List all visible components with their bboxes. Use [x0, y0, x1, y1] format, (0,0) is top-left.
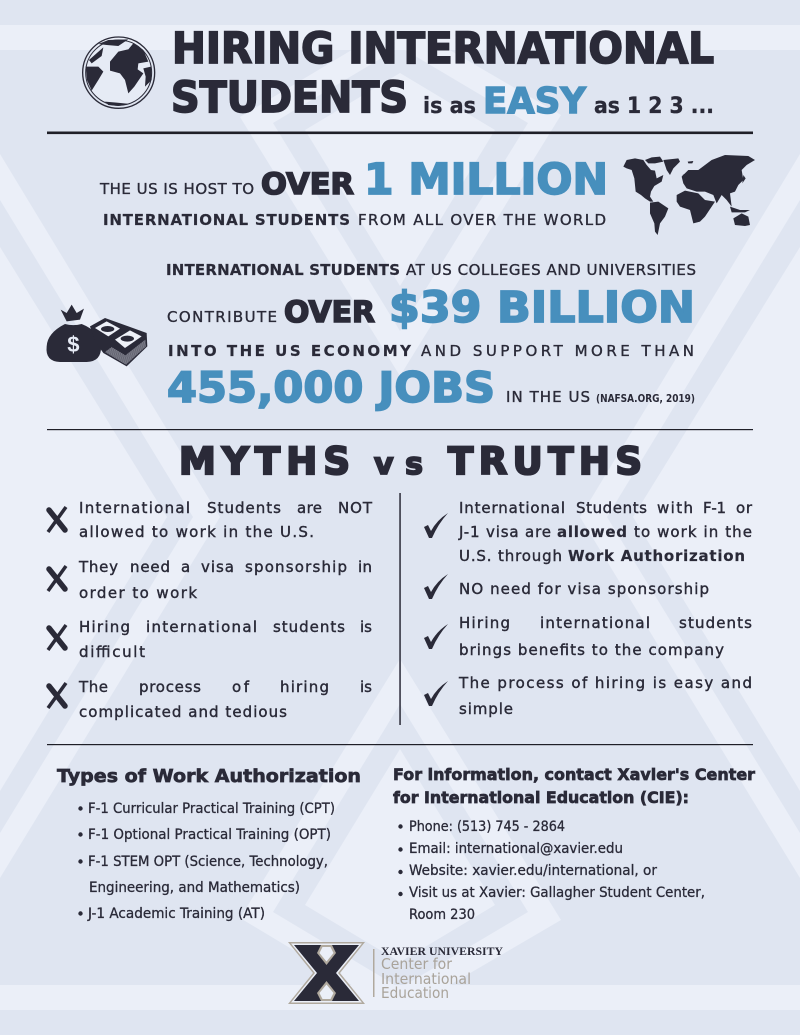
- stat: economic contribution: [166, 261, 696, 412]
- panel: types of work authorization: [57, 766, 361, 922]
- stat: economic contribution: (NAFSA.ORG, 2019): [596, 393, 695, 405]
- myth 1: are: [297, 499, 322, 517]
- list: [78, 801, 335, 922]
- title: HIRING INTERNATIONAL: [172, 24, 714, 74]
- list: Room 230: [409, 907, 475, 923]
- stat: 1 million students: FROM ALL OVER THE WORLD: [358, 211, 606, 229]
- truth 1: [424, 499, 753, 565]
- myth 2: order to work: [79, 584, 197, 602]
- icon: globe: [83, 37, 155, 108]
- myth 4: hiring: [280, 678, 329, 696]
- myth 4: is: [360, 678, 372, 696]
- myth 2: visa: [201, 558, 234, 576]
- myth 1: Students: [207, 499, 281, 517]
- truth 1: J-1 visa are: [458, 523, 551, 541]
- myth 4: process: [139, 678, 201, 696]
- list: Engineering, and Mathematics): [89, 880, 300, 896]
- heading: myths vs truths: [179, 440, 642, 483]
- myth 2: They: [78, 558, 118, 576]
- myth 3: international: [146, 618, 257, 636]
- truth 1: F-1: [703, 499, 726, 517]
- title: is as: [423, 94, 476, 119]
- title: [171, 24, 714, 123]
- title: as 1 2 3 ...: [594, 94, 714, 119]
- title: STUDENTS: [171, 73, 408, 123]
- stat: economic contribution: AT US COLLEGES AND UNIVERSITIES: [406, 261, 696, 279]
- myth 2: need: [130, 558, 170, 576]
- title: EASY: [483, 81, 587, 122]
- list: J-1 Academic Training (AT): [87, 906, 265, 922]
- truth 1: U.S. through: [459, 547, 562, 565]
- truth 2: [424, 574, 709, 599]
- panel: contact information: [393, 765, 755, 923]
- list: [398, 819, 705, 923]
- myth 1: [48, 499, 373, 541]
- myth 1: International: [79, 499, 190, 517]
- stat: economic contribution: INTO THE US ECONOMY: [168, 342, 412, 360]
- heading: myths vs truths: MYTHS: [179, 440, 350, 483]
- stat: economic contribution: AND SUPPORT MORE THAN: [421, 342, 694, 360]
- list: F-1 STEM OPT (Science, Technology,: [88, 854, 328, 870]
- myth 4: The: [78, 678, 108, 696]
- truth 1: with: [657, 499, 693, 517]
- stat: 1 million students: INTERNATIONAL STUDENTS: [103, 211, 350, 229]
- list: Phone: (513) 745 - 2864: [409, 819, 565, 835]
- myth 3: Hiring: [79, 618, 130, 636]
- list: F-1 Optional Practical Training (OPT): [88, 827, 331, 843]
- logo text: International: [381, 970, 471, 988]
- logo: Xavier University Center for International Education: [288, 942, 504, 1004]
- myth 3: is: [360, 618, 372, 636]
- myth 2: a: [181, 558, 190, 576]
- myth 3: [48, 618, 372, 661]
- stat: 1 million students: [99, 155, 608, 229]
- list: F-1 Curricular Practical Training (CPT): [88, 801, 335, 817]
- stat: 1 million students: 1 MILLION: [364, 155, 608, 205]
- truth 4: [424, 674, 752, 718]
- truth 2: NO need for visa sponsorship: [459, 580, 709, 598]
- logo text: XAVIER UNIVERSITY: [381, 946, 504, 958]
- icon: world map: [623, 155, 755, 235]
- truth 3: brings benefits to the company: [459, 641, 724, 659]
- myth 2: [48, 558, 372, 602]
- myth 2: in: [358, 558, 372, 576]
- heading: myths vs truths: vs: [374, 447, 423, 482]
- truth 1: or: [736, 499, 753, 517]
- stat: economic contribution: IN THE US: [506, 388, 590, 406]
- stat: economic contribution: INTERNATIONAL STUDENTS: [166, 261, 400, 279]
- stat: economic contribution: CONTRIBUTE: [167, 308, 277, 326]
- truth 4: The process of hiring is easy and: [458, 674, 752, 692]
- stat: economic contribution: OVER: [284, 295, 375, 329]
- heading: for International Education (CIE):: [393, 788, 689, 807]
- heading: For information, contact Xavier's Center: [393, 765, 755, 784]
- truth 1: International: [459, 499, 565, 517]
- logo text: Education: [381, 984, 449, 1002]
- myth 3: students: [273, 618, 345, 636]
- truth 1: allowed: [557, 523, 627, 541]
- panel: truths: [424, 499, 753, 718]
- icon: X mark: [288, 942, 365, 1004]
- truth 3: Hiring: [459, 614, 510, 632]
- panel: myths: [48, 499, 373, 721]
- stat: economic contribution: $39 BILLION: [389, 283, 695, 333]
- stat: 1 million students: OVER: [261, 167, 354, 201]
- myth 2: sponsorship: [245, 558, 347, 576]
- heading: myths vs truths: TRUTHS: [448, 440, 642, 483]
- list: Email: international@xavier.edu: [409, 841, 623, 857]
- myth 1: allowed to work in the U.S.: [79, 523, 314, 541]
- truth 3: [424, 614, 752, 659]
- icon: money bag and cash: $: [67, 332, 79, 357]
- list: Website: xavier.edu/international, or: [409, 863, 657, 879]
- heading: Types of Work Authorization: [57, 766, 361, 787]
- stat: economic contribution: 455,000 JOBS: [167, 363, 495, 412]
- heading: [393, 765, 755, 807]
- truth 1: Students: [576, 499, 647, 517]
- myth 1: NOT: [338, 499, 373, 517]
- truth 4: simple: [459, 700, 513, 718]
- stat: 1 million students: THE US IS HOST TO: [99, 180, 254, 198]
- icon: money bag and cash: [46, 305, 147, 366]
- truth 3: students: [679, 614, 752, 632]
- logo text: [381, 946, 504, 1002]
- logo text: Center for: [381, 955, 453, 973]
- list: Visit us at Xavier: Gallagher Student Center,: [409, 885, 705, 901]
- myth 4: [48, 678, 372, 721]
- myth 4: complicated and tedious: [79, 703, 287, 721]
- myth 3: difficult: [79, 643, 145, 661]
- truth 1: to work in the: [634, 523, 752, 541]
- myth 4: of: [232, 678, 250, 696]
- truth 1: Work Authorization: [568, 547, 745, 565]
- truth 3: international: [540, 614, 650, 632]
